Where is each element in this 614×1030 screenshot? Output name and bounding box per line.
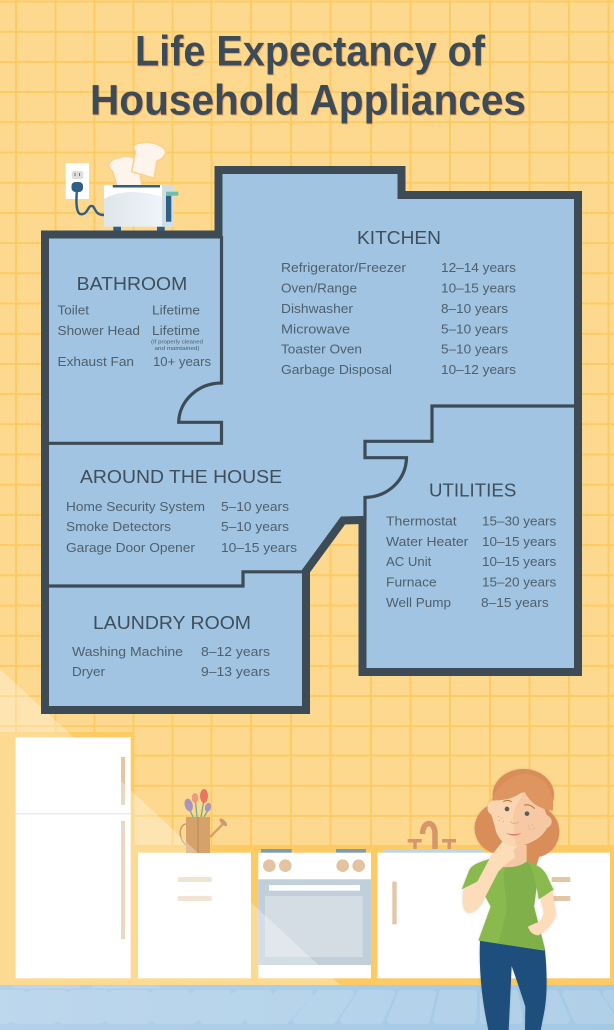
panel: utilities: 15–30 years: [482, 513, 557, 528]
panel: laundry room: [72, 612, 271, 679]
panel: kitchen: Garbage Disposal: [281, 362, 392, 377]
shirt: [462, 859, 554, 951]
panel: kitchen: 5–10 years: [441, 321, 509, 336]
panel: laundry room: 9–13 years: [201, 664, 271, 679]
title: Household Appliances: [90, 76, 526, 124]
panel: kitchen: 12–14 years: [441, 260, 517, 275]
floor: [0, 985, 614, 1030]
panel: utilities: UTILITIES: [429, 480, 516, 501]
panel: utilities: 10–15 years: [482, 554, 557, 569]
watering can with tulips: [180, 789, 228, 853]
panel: laundry room: Washing Machine: [72, 644, 183, 659]
panel: laundry room: 8–12 years: [201, 644, 271, 659]
panel: around the house: 5–10 years: [221, 519, 290, 534]
panel: kitchen: 5–10 years: [441, 342, 509, 357]
panel: around the house: 10–15 years: [221, 540, 298, 555]
outer walls: [45, 170, 578, 710]
panel: utilities: Thermostat: [386, 513, 457, 528]
icon: toaster with bread: [104, 142, 178, 230]
panel: bathroom: Lifetime: [152, 323, 200, 338]
panel: around the house: 5–10 years: [221, 499, 290, 514]
refrigerator: [16, 737, 131, 978]
panel: bathroom: (If properly cleaned: [151, 339, 203, 345]
panel: kitchen: KITCHEN: [357, 227, 441, 248]
panel: kitchen: 8–10 years: [441, 301, 509, 316]
panel: kitchen: Microwave: [281, 321, 350, 336]
panel: utilities: Well Pump: [386, 595, 451, 610]
panel: bathroom: Lifetime: [152, 303, 200, 318]
panel: bathroom: [58, 273, 212, 369]
panel: around the house: AROUND THE HOUSE: [80, 466, 282, 487]
panel: bathroom: and maintained): [154, 346, 200, 352]
panel: utilities: Water Heater: [386, 534, 469, 549]
panel: kitchen: Toaster Oven: [281, 342, 362, 357]
panel: bathroom: Toilet: [58, 303, 89, 318]
lower cabinet: [138, 853, 251, 978]
floor plan: [45, 170, 578, 710]
title: Life Expectancy of: [135, 28, 486, 76]
panel: kitchen: Refrigerator/Freezer: [281, 260, 407, 275]
panel: around the house: [66, 466, 298, 555]
panel: laundry room: Dryer: [72, 664, 106, 679]
title: [90, 28, 526, 124]
neck: [502, 845, 527, 867]
interior walls: [47, 236, 574, 586]
jeans: [480, 941, 547, 1030]
panel: utilities: 10–15 years: [482, 534, 557, 549]
facial features: [498, 800, 535, 836]
panel: kitchen: [281, 227, 517, 377]
panel: around the house: Home Security System: [66, 499, 205, 514]
right arm: [528, 890, 556, 935]
panel: kitchen: 10–12 years: [441, 362, 517, 377]
fringe: [492, 774, 553, 811]
left arm: [463, 839, 519, 913]
oven: [258, 849, 371, 978]
panel: laundry room: LAUNDRY ROOM: [93, 612, 251, 633]
panel: bathroom: 10+ years: [153, 354, 212, 369]
panel: kitchen: Dishwasher: [281, 301, 354, 316]
panel: utilities: 8–15 years: [481, 595, 549, 610]
panel: bathroom: BATHROOM: [77, 273, 187, 294]
hair: [475, 769, 559, 865]
icon: outlet and plug: [66, 163, 104, 215]
panel: utilities: Furnace: [386, 575, 437, 590]
panel: bathroom: Shower Head: [58, 323, 140, 338]
panel: bathroom: Exhaust Fan: [58, 354, 134, 369]
panel: utilities: 15–20 years: [482, 575, 557, 590]
panel: kitchen: 10–15 years: [441, 280, 517, 296]
panel: utilities: [386, 480, 557, 610]
panel: kitchen: Oven/Range: [281, 280, 357, 296]
sink and faucet: [377, 824, 610, 978]
panel: utilities: AC Unit: [386, 554, 432, 569]
light beam: [0, 669, 340, 985]
panel: around the house: Smoke Detectors: [66, 519, 172, 534]
panel: around the house: Garage Door Opener: [66, 540, 196, 555]
kitchen scene base band: [0, 732, 614, 985]
woman thinking: [462, 769, 559, 1030]
face: [488, 793, 552, 847]
